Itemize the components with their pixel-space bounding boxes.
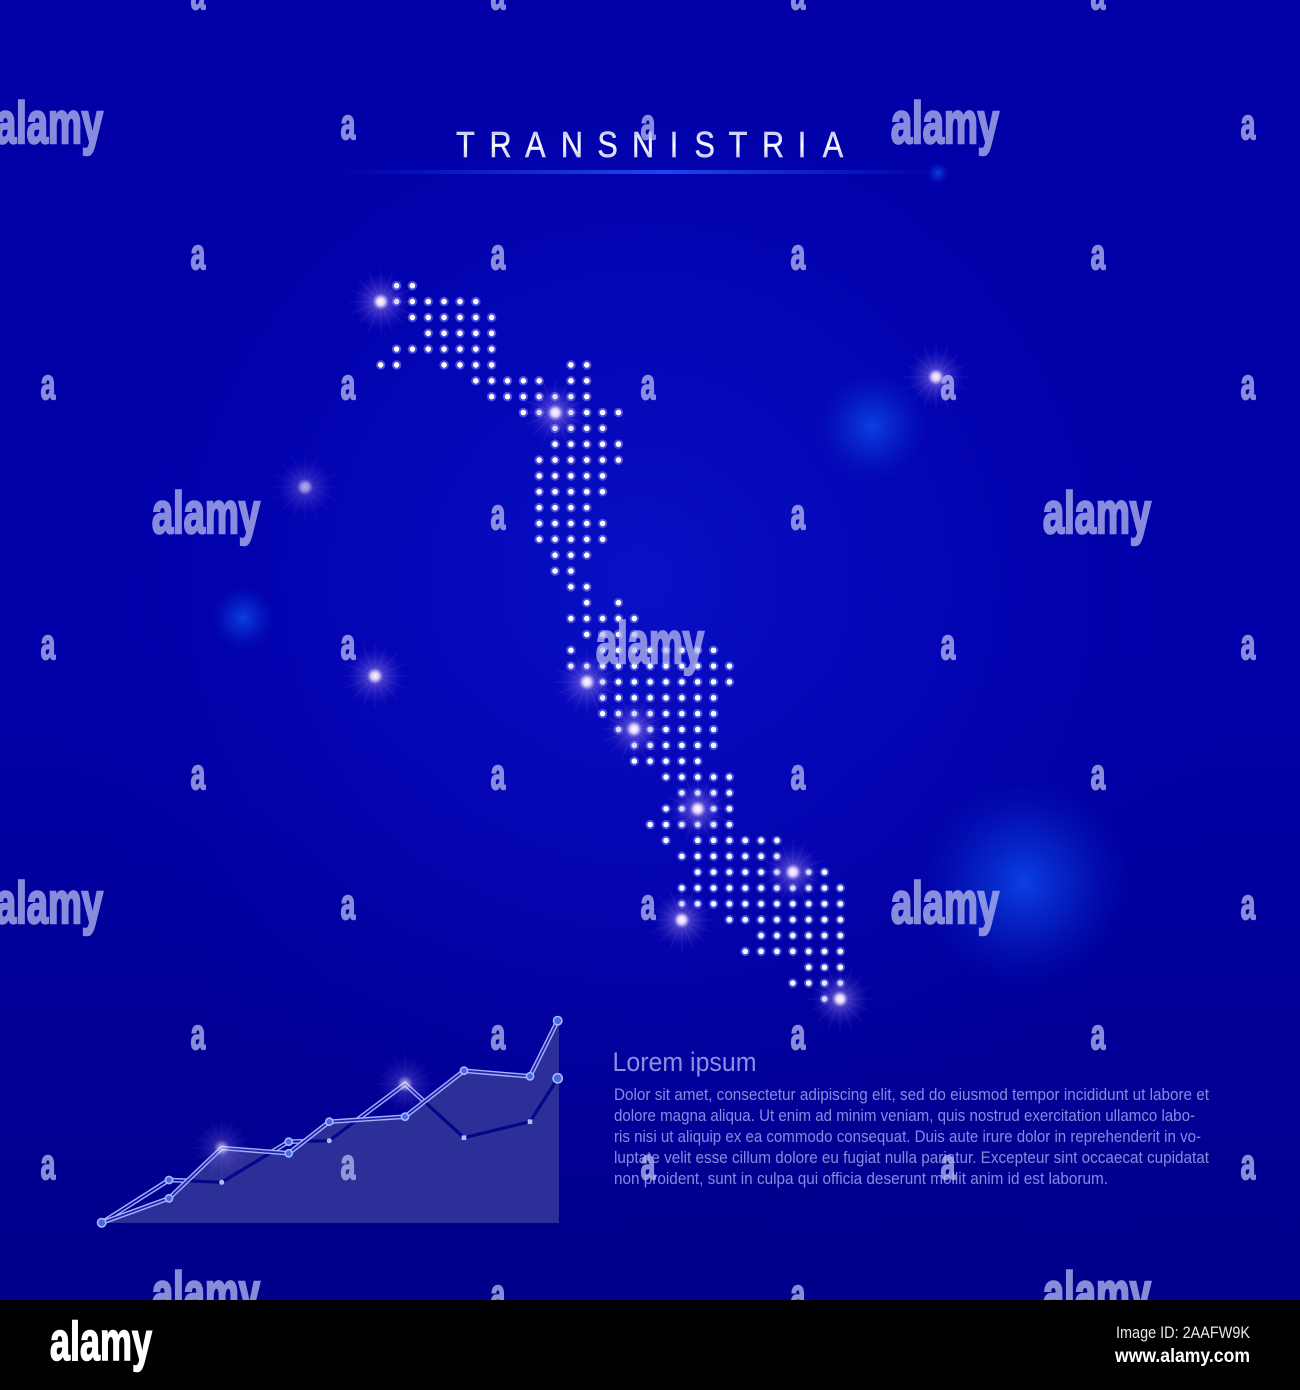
watermark small marks: a: [1241, 619, 1256, 669]
watermark small marks: a: [41, 359, 56, 409]
watermark small marks: a: [641, 359, 656, 409]
watermark small marks: a: [1091, 229, 1106, 279]
watermark words: alamy: [1043, 481, 1151, 546]
watermark words: [0, 91, 1151, 1326]
watermark small marks: a: [191, 749, 206, 799]
watermark small marks: a: [791, 1009, 806, 1059]
watermark small marks: a: [191, 1009, 206, 1059]
watermark words: alamy: [596, 611, 704, 676]
body text block: non proident, sunt in culpa qui officia deserunt mollit anim id est laborum.: [614, 1170, 1108, 1188]
body text block: Dolor sit amet, consectetur adipiscing elit, sed do eiusmod tempor incididunt ut labore et: [614, 1086, 1209, 1104]
footer bar: [0, 1300, 1300, 1390]
watermark small marks: a: [1091, 1009, 1106, 1059]
watermark small marks: a: [491, 489, 506, 539]
watermark words: alamy: [152, 1261, 260, 1326]
watermark small marks: a: [791, 489, 806, 539]
watermark small marks: a: [341, 359, 356, 409]
watermark small marks: a: [641, 99, 656, 149]
watermark small marks: a: [641, 879, 656, 929]
watermark small marks: a: [1241, 1139, 1256, 1189]
heading: Lorem ipsum: Lorem ipsum: [612, 1047, 756, 1077]
watermark small marks: a: [791, 229, 806, 279]
watermark small marks: a: [491, 1269, 506, 1319]
watermark words: alamy: [1043, 1261, 1151, 1326]
watermark small marks: a: [491, 1009, 506, 1059]
watermark small marks: a: [641, 1139, 656, 1189]
watermark words: alamy: [152, 481, 260, 546]
watermark words: alamy: [891, 871, 999, 936]
watermark small marks: a: [41, 619, 56, 669]
body text block: luptate velit esse cillum dolore eu fugiat nulla pariatur. Excepteur sint occaecat cupidatat: [614, 1149, 1209, 1167]
main series double line: [102, 1021, 558, 1223]
secondary series nodes: [219, 1119, 532, 1185]
body text block: [614, 1086, 1209, 1188]
area chart: [98, 1016, 562, 1227]
watermark small marks: a: [491, 749, 506, 799]
website: www.alamy.com: [1114, 1346, 1250, 1367]
watermark small marks: a: [791, 1269, 806, 1319]
watermark small marks: a: [1241, 879, 1256, 929]
watermark small marks: a: [1241, 99, 1256, 149]
watermark small marks: a: [1091, 749, 1106, 799]
title underline: [335, 162, 949, 184]
title: TRANSNISTRIA: [456, 126, 844, 166]
watermark small marks: a: [341, 619, 356, 669]
main series nodes: [98, 1016, 562, 1227]
glowing city lights: [273, 270, 968, 1031]
chart glow points: [190, 1052, 437, 1180]
watermark small marks: a: [1241, 359, 1256, 409]
watermark small marks: a: [341, 879, 356, 929]
watermark small marks: a: [791, 749, 806, 799]
watermark small marks: a: [341, 1139, 356, 1189]
watermark small marks: a: [191, 229, 206, 279]
watermark small marks: a: [491, 229, 506, 279]
blue glow orbs: [211, 370, 1129, 987]
watermark small marks: a: [941, 1139, 956, 1189]
light series outline above area: [104, 1081, 424, 1219]
dark series line: [102, 1078, 558, 1223]
body text block: dolore magna aliqua. Ut enim ad minim veniam, quis nostrud exercitation ullamco labo-: [614, 1107, 1195, 1125]
dotted map of Transnistria: [381, 286, 841, 999]
footer logo: alamy: [50, 1310, 152, 1372]
watermark small marks: a: [941, 359, 956, 409]
watermark small marks: a: [41, 1139, 56, 1189]
watermark small marks: a: [941, 619, 956, 669]
chart area fill: [102, 1021, 559, 1223]
image id: Image ID: 2AAFW9K: [1116, 1324, 1250, 1342]
watermark words: alamy: [891, 91, 999, 156]
watermark small marks: a: [341, 99, 356, 149]
body text block: ris nisi ut aliquip ex ea commodo consequat. Duis aute irure dolor in reprehenderit in vo-: [614, 1128, 1201, 1146]
